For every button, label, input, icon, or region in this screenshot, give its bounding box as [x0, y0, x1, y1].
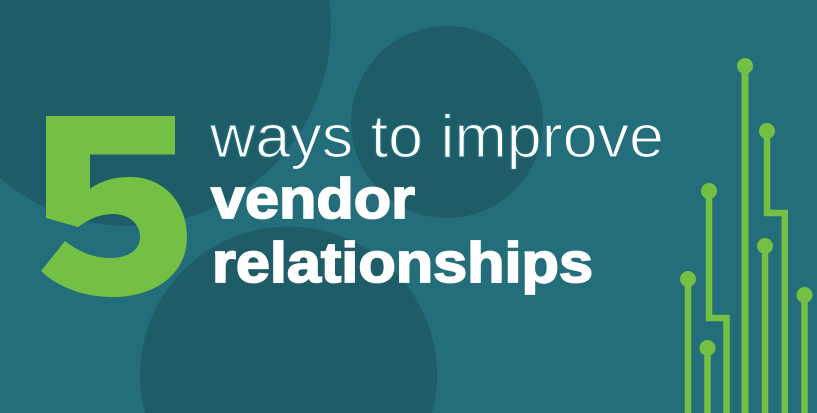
circuit line 7 — [796, 287, 812, 413]
circuit line 5 — [700, 340, 716, 413]
circuit line 4 — [680, 271, 696, 413]
heading: ways to improve: ways to improve — [209, 103, 664, 170]
circuit line 1 — [737, 58, 753, 413]
circuit line 2 — [759, 123, 785, 413]
heading: relationships: relationships — [212, 231, 593, 295]
circuit lines icon — [680, 58, 812, 413]
background circles — [0, 0, 543, 413]
circuit line 3 — [701, 183, 726, 413]
big number 5 — [41, 116, 187, 297]
heading: vendor: vendor — [211, 167, 415, 231]
circuit line 6 — [757, 238, 773, 413]
